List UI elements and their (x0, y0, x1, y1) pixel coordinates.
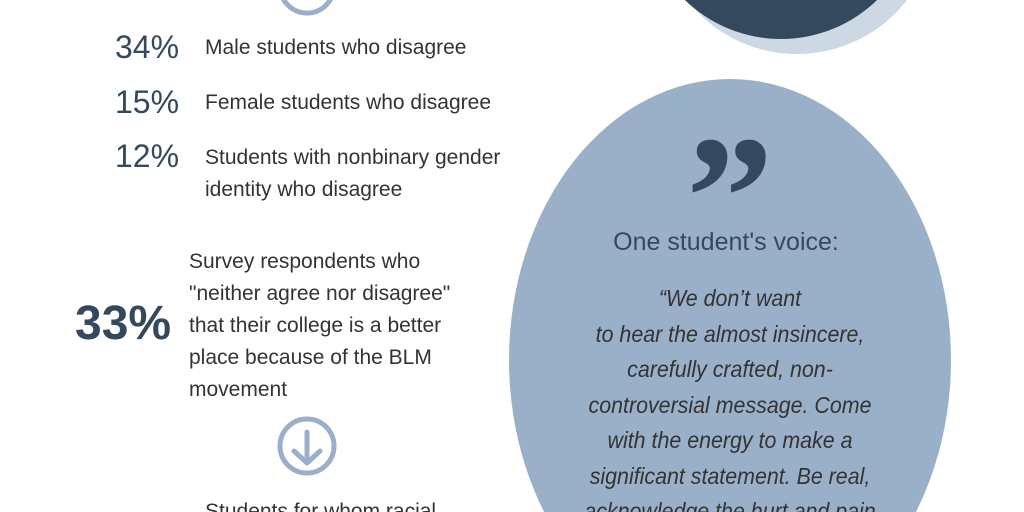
panel: quote ellipse (509, 79, 951, 512)
heading: one student's voice: One student's voice: (613, 228, 839, 256)
quote text: to hear the almost insincere, (596, 320, 864, 346)
stat: nonbinary: 12% (115, 138, 179, 174)
icon: arrow top (280, 0, 334, 13)
stat: neither agree nor disagree (75, 250, 450, 401)
stat: nonbinary: Students with nonbinary gender (205, 146, 500, 169)
quote text: carefully crafted, non- (627, 356, 833, 382)
stat: female (115, 84, 491, 120)
quote text: significant statement. Be real, (590, 462, 870, 488)
stat: neither agree nor disagree: place because of the BLM (189, 346, 432, 369)
stat: male: Male students who disagree (205, 36, 466, 59)
stat: neither agree nor disagree: that their college is a better (189, 314, 441, 337)
stat: neither agree nor disagree: 33% (75, 297, 171, 350)
stat: neither agree nor disagree: Survey respondents who (189, 250, 420, 273)
stat: nonbinary: identity who disagree (205, 178, 402, 201)
stat: neither agree nor disagree: movement (189, 378, 287, 401)
quote text: “We don’t want (659, 285, 801, 311)
stat: male (115, 29, 466, 65)
quote text (584, 285, 876, 512)
quote text: controversial message. Come (589, 392, 871, 418)
stat: nonbinary (115, 138, 500, 201)
stat: female: 15% (115, 84, 179, 120)
icon: arrow down (280, 419, 334, 473)
stat: female: Female students who disagree (205, 91, 491, 114)
stat: neither agree nor disagree: "neither agree nor disagree" (189, 282, 450, 305)
stat: male: 34% (115, 29, 179, 65)
icon: quote mark: ” (686, 100, 774, 294)
quote text: with the energy to make a (608, 427, 852, 453)
